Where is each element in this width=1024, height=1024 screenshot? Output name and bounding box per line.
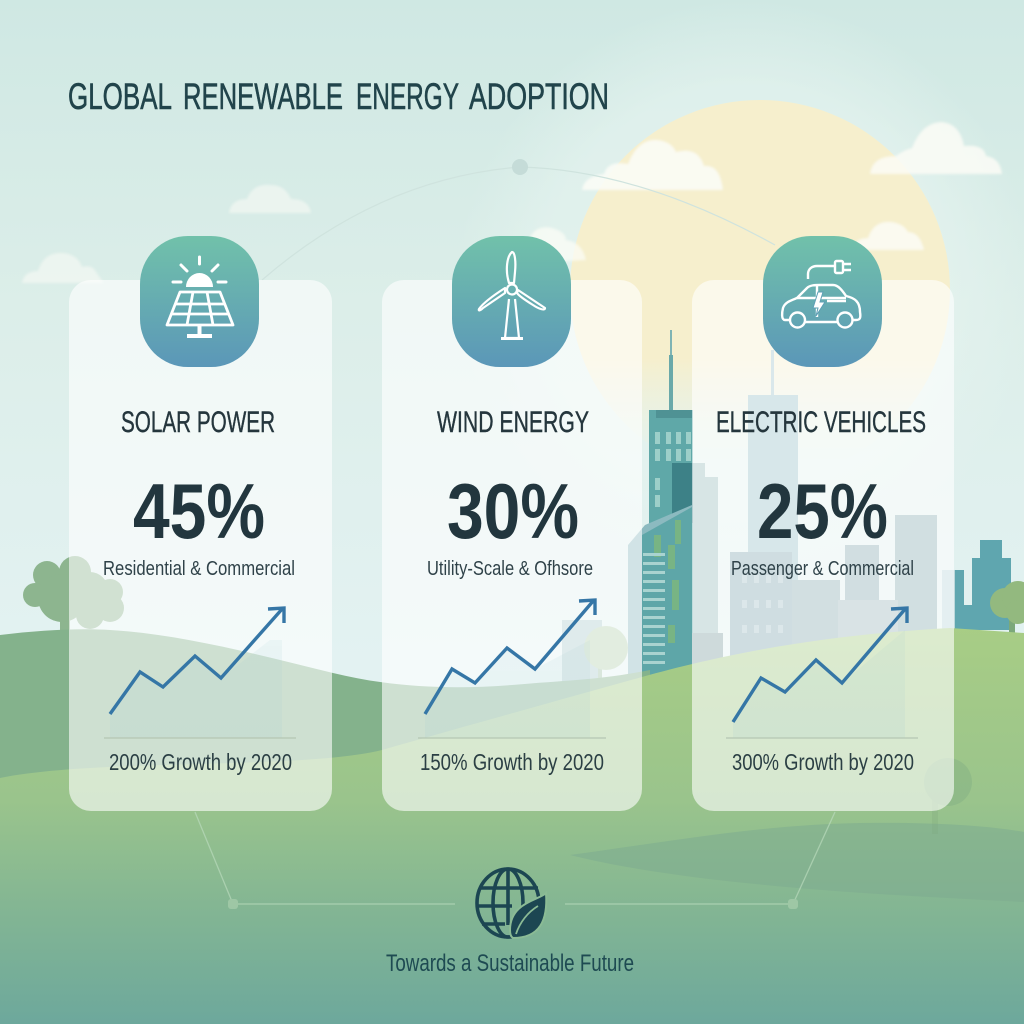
footer connector lines [195, 812, 835, 909]
footer text: Towards a Sustainable Future [386, 950, 634, 977]
caption: solar growth: 200% Growth by 2020 [109, 749, 292, 775]
trees [23, 556, 1024, 680]
stat: 30%: 30% [447, 467, 579, 555]
icon: wind turbine [452, 236, 571, 367]
stat: 25%: 25% [757, 467, 888, 555]
connecting arc with node [262, 159, 775, 280]
panel: electric vehicles [692, 236, 954, 811]
subtitle: utility-scale and offshore: Utility-Scale & Ofhsore [427, 558, 593, 580]
icon: globe with leaf [477, 869, 546, 938]
subtitle: residential and commercial: Residential & Commercial [103, 558, 295, 580]
city skyline [562, 330, 1011, 690]
back hill [0, 629, 650, 860]
icon: electric car [763, 236, 882, 367]
caption: wind growth: 150% Growth by 2020 [420, 749, 604, 775]
icon: solar panel [140, 236, 259, 367]
panel: wind energy [382, 236, 642, 811]
front hill [0, 628, 1024, 1024]
title: ADOPTION [469, 76, 609, 117]
heading: wind energy: WIND ENERGY [437, 406, 589, 439]
title: ENERGY [356, 76, 459, 117]
clouds [22, 122, 1002, 283]
heading: electric vehicles: ELECTRIC VEHICLES [716, 406, 926, 439]
subtitle: passenger and commercial: Passenger & Commercial [731, 558, 914, 580]
line chart: solar growth [104, 608, 296, 738]
heading: solar power: SOLAR POWER [121, 406, 275, 439]
panel: solar power [69, 236, 332, 811]
sun halo [455, 0, 1024, 580]
title: RENEWABLE [183, 76, 343, 117]
sun [570, 100, 950, 480]
distant tree lower right [924, 758, 972, 834]
title [68, 76, 609, 117]
line chart: electric vehicle growth [726, 608, 918, 738]
front shadow hill [570, 823, 1024, 902]
line chart: wind growth [418, 600, 606, 738]
title: GLOBAL [68, 76, 172, 117]
stat: 45%: 45% [133, 467, 265, 555]
caption: electric vehicle growth: 300% Growth by 2020 [732, 749, 914, 775]
